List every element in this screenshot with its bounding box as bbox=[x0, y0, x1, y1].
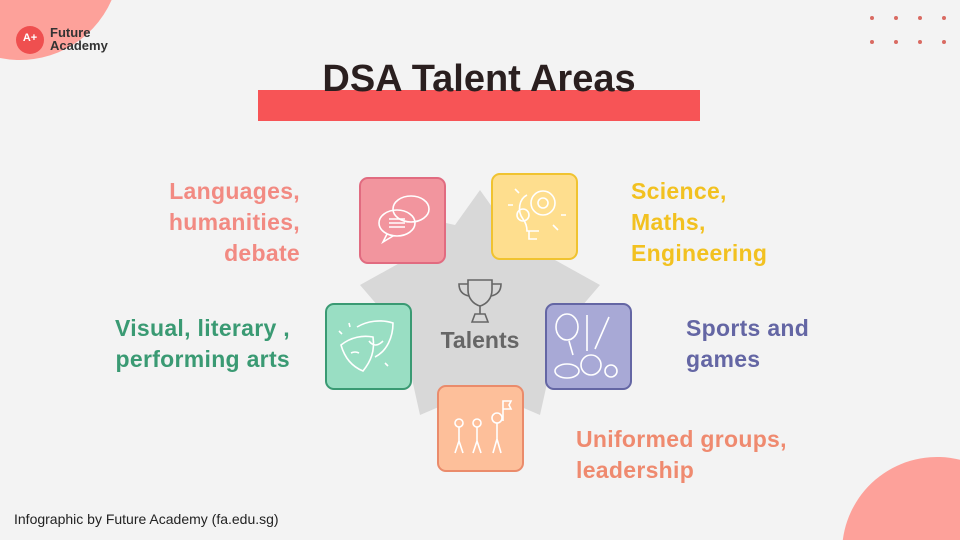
label: uniformed: leadership bbox=[576, 457, 694, 483]
label: arts: Visual, literary , bbox=[115, 315, 290, 341]
label: languages: debate bbox=[224, 240, 300, 266]
center: trophy and Talents: Talents bbox=[441, 327, 519, 353]
logo: A+ bbox=[23, 32, 37, 44]
label: languages bbox=[169, 178, 300, 266]
label: uniformed: Uniformed groups, bbox=[576, 426, 787, 452]
logo: Future bbox=[50, 25, 90, 40]
label: sports: games bbox=[686, 346, 760, 372]
box: arts bbox=[325, 303, 412, 390]
label: languages: humanities, bbox=[169, 209, 300, 235]
dot grid bbox=[870, 16, 946, 44]
gray star bbox=[360, 190, 600, 415]
logo: Academy bbox=[50, 38, 108, 53]
label: uniformed bbox=[576, 426, 787, 483]
box: uniformed bbox=[437, 385, 524, 472]
footer credit: Infographic by Future Academy (fa.edu.sg) bbox=[14, 511, 279, 527]
title bar bbox=[258, 90, 700, 121]
label: arts: performing arts bbox=[116, 346, 290, 372]
box: languages bbox=[359, 177, 446, 264]
label: languages: Languages, bbox=[169, 178, 300, 204]
label: arts bbox=[115, 315, 290, 372]
logo bbox=[16, 25, 108, 54]
label: science: Engineering bbox=[631, 240, 767, 266]
title: DSA Talent Areas bbox=[322, 58, 636, 100]
center: trophy and Talents bbox=[440, 279, 519, 353]
box: sports bbox=[545, 303, 632, 390]
label: science: Maths, bbox=[631, 209, 706, 235]
label: science: Science, bbox=[631, 178, 727, 204]
label: sports bbox=[686, 315, 809, 372]
label: sports: Sports and bbox=[686, 315, 809, 341]
label: science bbox=[631, 178, 767, 266]
box: science bbox=[491, 173, 578, 260]
